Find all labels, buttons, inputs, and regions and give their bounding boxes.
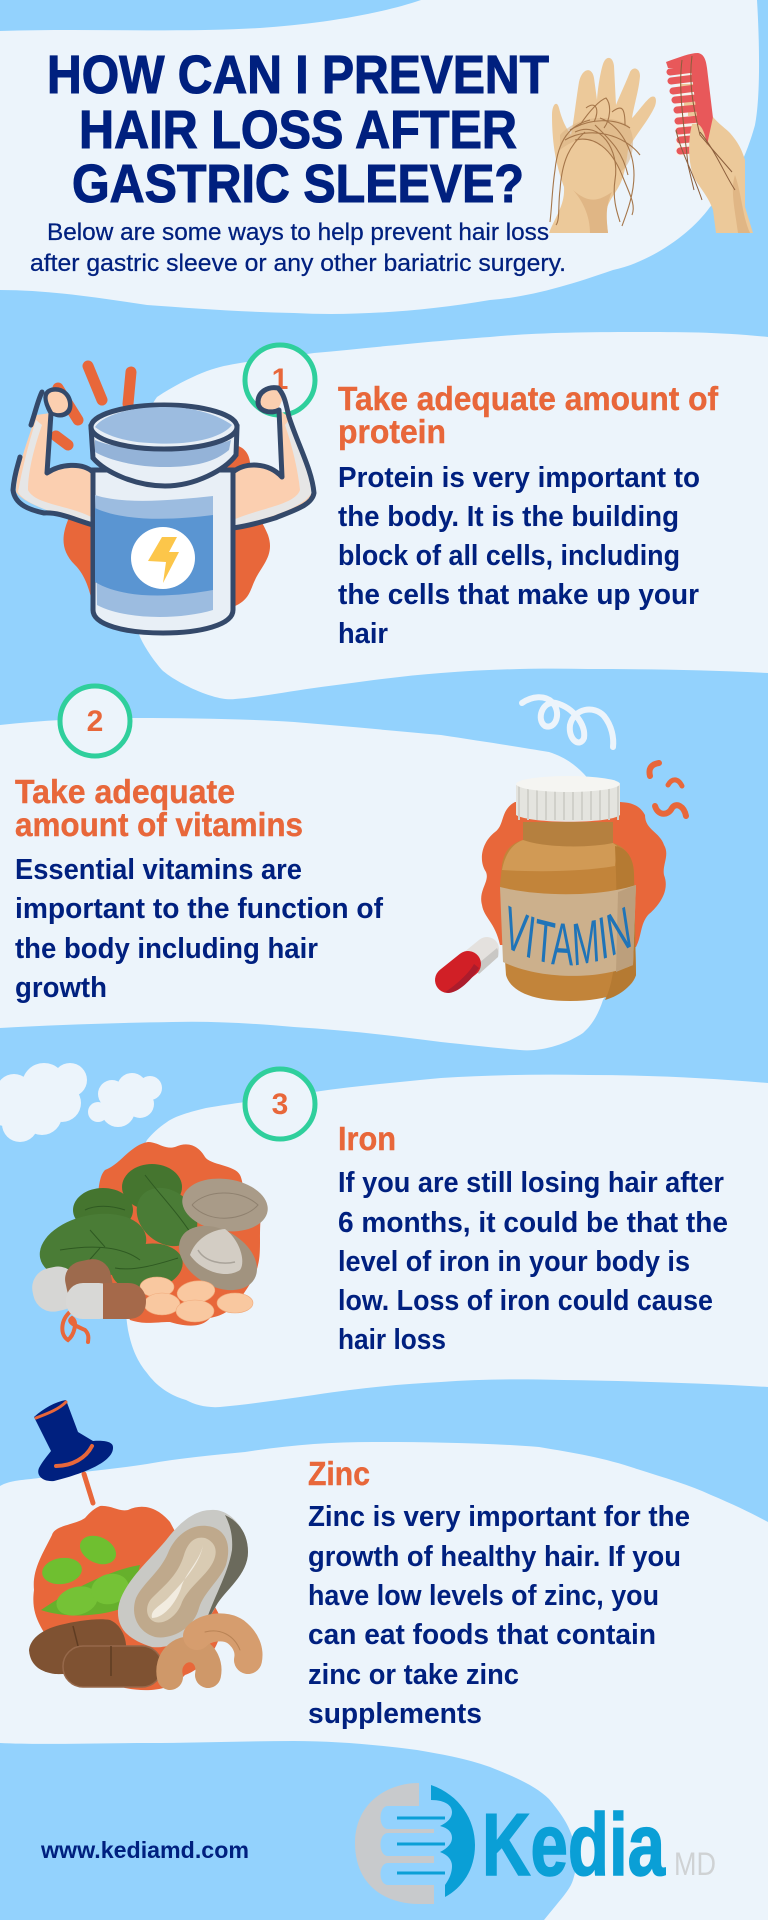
text: iron [338, 1120, 728, 1356]
text: iron: low. Loss of iron could cause [338, 1285, 713, 1317]
panel: section 3 background [124, 1075, 768, 1407]
logo: Kedia MD [355, 1783, 716, 1904]
text: zinc: have low levels of zinc, you [308, 1580, 659, 1612]
jar lid [91, 427, 237, 486]
text: iron: level of iron in your body is [338, 1246, 690, 1278]
left arm [16, 413, 93, 525]
step 3 number circle: 3 [272, 1088, 288, 1121]
icon: hand holding comb with hair [666, 53, 753, 233]
logo: Kedia MD: MD [674, 1846, 716, 1882]
text: zinc: growth of healthy hair. If you [308, 1541, 681, 1573]
text: zinc: supplements [308, 1698, 482, 1730]
text: iron: If you are still losing hair after [338, 1167, 724, 1199]
spinach leaves [34, 1164, 209, 1296]
cashews [169, 1627, 248, 1677]
orange scalloped blob [33, 1506, 222, 1690]
title [47, 45, 549, 214]
text: vitamins [15, 773, 383, 1004]
panel: section 2 background [0, 718, 626, 1050]
text: vitamins: important to the function of [15, 893, 383, 925]
orange rays [56, 366, 131, 445]
icon: vitamin bottle and pill: VITAMIN [508, 906, 631, 966]
tablets [29, 1619, 162, 1687]
step 3 number circle [245, 1069, 315, 1139]
icon: push pin [34, 1400, 113, 1503]
panel: header background [0, 0, 759, 314]
icon: zinc-rich foods [29, 1506, 248, 1690]
text: iron: Iron [338, 1120, 396, 1157]
text: vitamins: amount of vitamins [15, 806, 303, 843]
pill [466, 949, 487, 966]
text: vitamins: the body including hair [15, 933, 318, 965]
logo wordmark: Kedia [482, 1795, 666, 1894]
text: protein: Take adequate amount of [338, 380, 719, 417]
step 1 number circle: 1 [272, 363, 288, 396]
clams [179, 1173, 271, 1237]
capsules [28, 1256, 116, 1315]
logo blue half [431, 1785, 475, 1897]
icon: white squiggle [522, 697, 613, 747]
icon: orange squiggles [649, 763, 686, 816]
text: protein: the body. It is the building [338, 501, 679, 533]
text: protein: hair [338, 618, 388, 650]
icon: vitamin bottle and pill [435, 776, 666, 1001]
text: vitamins: Take adequate [15, 773, 235, 810]
text: protein: block of all cells, including [338, 540, 680, 572]
text: vitamins: Essential vitamins are [15, 854, 302, 886]
text: zinc [308, 1455, 690, 1730]
green peas and pod [75, 1530, 121, 1570]
title: HOW CAN I PREVENT [47, 45, 549, 105]
title: HAIR LOSS AFTER [79, 100, 517, 160]
icon: clouds [0, 1063, 162, 1142]
label lightning badge [131, 527, 195, 589]
text: protein [338, 380, 719, 650]
squiggle [62, 1311, 88, 1342]
text: zinc: zinc or take zinc [308, 1659, 519, 1691]
icon: iron-rich foods [28, 1142, 271, 1342]
step 2 number circle: 2 [87, 705, 103, 738]
icon: protein jar with flexing arms [13, 366, 314, 633]
title: GASTRIC SLEEVE? [72, 154, 524, 214]
step 1 number circle [245, 345, 315, 415]
icon: open hand holding shed hair [549, 58, 656, 233]
bottle body [500, 822, 636, 1001]
orange scalloped blob [481, 802, 666, 947]
text: zinc: can eat foods that contain [308, 1619, 656, 1651]
label band [500, 885, 636, 976]
website url: www.kediamd.com [40, 1837, 249, 1863]
text: zinc: Zinc [308, 1455, 370, 1492]
text: vitamins: growth [15, 972, 107, 1004]
step 2 number circle [60, 686, 130, 756]
panel: section 1 background [128, 332, 768, 699]
text: zinc: Zinc is very important for the [308, 1501, 690, 1533]
bottle cap [516, 785, 620, 822]
oyster [118, 1510, 248, 1647]
intro text [30, 219, 566, 277]
intro text: after gastric sleeve or any other bariatric surgery. [30, 250, 566, 277]
text: iron: 6 months, it could be that the [338, 1207, 728, 1239]
text: protein: protein [338, 413, 446, 450]
text: iron: hair loss [338, 1324, 446, 1356]
jar body [93, 470, 233, 633]
right arm [233, 410, 314, 527]
orange scalloped blob [64, 445, 270, 607]
beans [140, 1277, 253, 1322]
intro text: Below are some ways to help prevent hair loss [47, 219, 549, 246]
logo gray half [355, 1783, 434, 1904]
text: protein: Protein is very important to [338, 462, 700, 494]
panel: section 4 and footer background [0, 1442, 768, 1920]
orange scalloped blob [92, 1142, 262, 1326]
text: protein: the cells that make up your [338, 579, 699, 611]
